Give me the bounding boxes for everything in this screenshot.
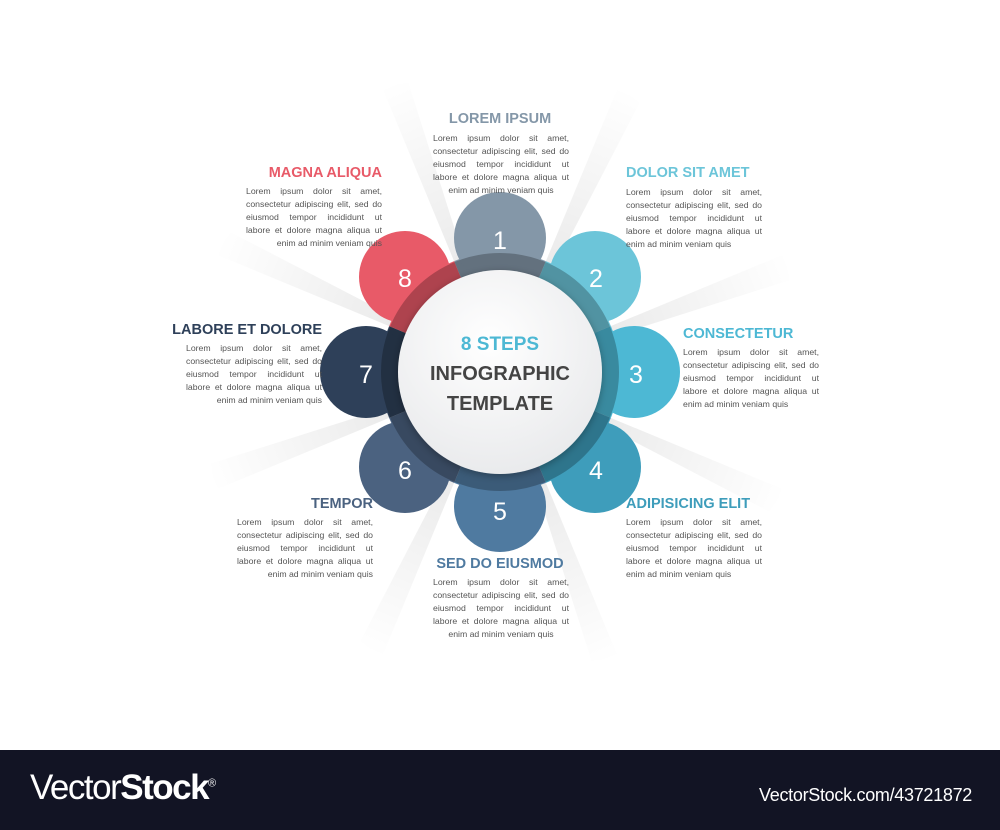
- petals: 8: [398, 265, 412, 293]
- text: Lorem ipsum dolor sit amet, consectetur adipiscing elit, sed do eiusmod tempor incididunt ut labore et dolore magna aliqua ut enim ad minim veniam quis: [433, 577, 569, 639]
- step 1 text: [433, 111, 569, 195]
- text: LOREM IPSUM: [449, 111, 551, 127]
- text: Lorem ipsum dolor sit amet, consectetur adipiscing elit, sed do eiusmod tempor incididunt ut labore et dolore magna aliqua ut enim ad minim veniam quis: [433, 133, 569, 195]
- step 3 text: [683, 326, 819, 409]
- text: ADIPISICING ELIT: [626, 496, 750, 512]
- center circle: [398, 270, 602, 474]
- text: Lorem ipsum dolor sit amet, consectetur adipiscing elit, sed do eiusmod tempor incididunt ut labore et dolore magna aliqua ut enim ad minim veniam quis: [237, 517, 373, 579]
- footer logo: VectorStock®: [30, 768, 215, 807]
- petals: 5: [493, 498, 507, 526]
- step 6 text: [237, 496, 373, 579]
- step 2 text: [626, 165, 762, 249]
- petals: 2: [589, 265, 603, 293]
- petals: [320, 192, 680, 552]
- petals: 7: [359, 361, 373, 389]
- step 5 text: [433, 556, 569, 639]
- petals: 6: [398, 457, 412, 485]
- text: Lorem ipsum dolor sit amet, consectetur adipiscing elit, sed do eiusmod tempor incididunt ut labore et dolore magna aliqua ut enim ad minim veniam quis: [626, 517, 762, 579]
- footer url: VectorStock.com/43721872: [759, 785, 972, 805]
- petals: 3: [629, 361, 643, 389]
- text: LABORE ET DOLORE: [172, 322, 322, 338]
- step 7 text: [172, 322, 322, 405]
- text: TEMPOR: [311, 496, 373, 512]
- petals: 1: [493, 227, 507, 255]
- center circle: INFOGRAPHIC: [430, 363, 570, 385]
- center circle: TEMPLATE: [447, 393, 553, 415]
- text: Lorem ipsum dolor sit amet, consectetur adipiscing elit, sed do eiusmod tempor incididunt ut labore et dolore magna aliqua ut enim ad minim veniam quis: [683, 347, 819, 409]
- text: CONSECTETUR: [683, 326, 793, 342]
- text: DOLOR SIT AMET: [626, 165, 750, 181]
- shadow rays: [204, 76, 796, 668]
- step 4 text: [626, 496, 762, 579]
- text: SED DO EIUSMOD: [436, 556, 564, 572]
- text: MAGNA ALIQUA: [269, 165, 382, 181]
- footer bar: [0, 750, 1000, 830]
- petals: 4: [589, 457, 603, 485]
- text: Lorem ipsum dolor sit amet, consectetur adipiscing elit, sed do eiusmod tempor incididunt ut labore et dolore magna aliqua ut enim ad minim veniam quis: [186, 343, 322, 405]
- step 8 text: [246, 165, 382, 248]
- center circle: 8 STEPS: [461, 334, 539, 355]
- text: Lorem ipsum dolor sit amet, consectetur adipiscing elit, sed do eiusmod tempor incididunt ut labore et dolore magna aliqua ut enim ad minim veniam quis: [246, 186, 382, 248]
- text: Lorem ipsum dolor sit amet, consectetur adipiscing elit, sed do eiusmod tempor incididunt ut labore et dolore magna aliqua ut enim ad minim veniam quis: [626, 187, 762, 249]
